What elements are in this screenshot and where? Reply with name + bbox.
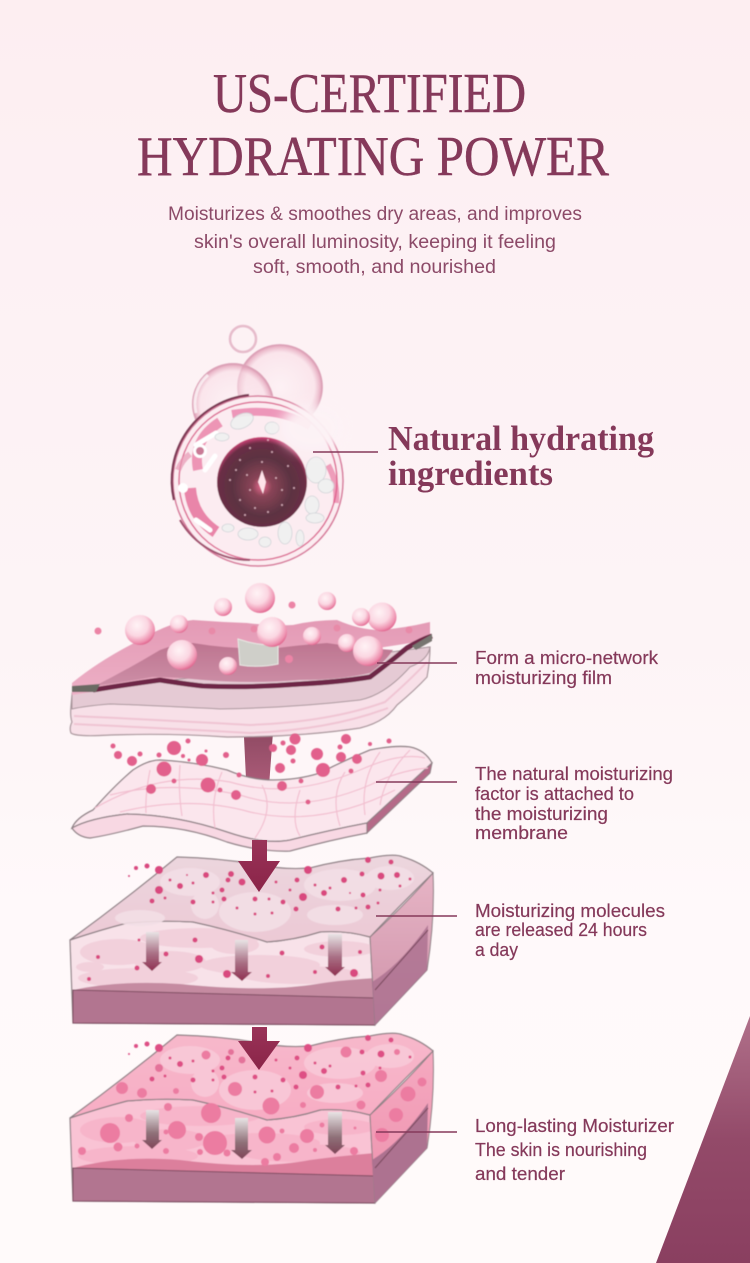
label: block: are released 24 hours [475, 920, 647, 940]
maroon band [93, 636, 432, 690]
label: block: a day [475, 940, 518, 960]
darker inner sheet [95, 643, 393, 686]
heading: natural hydrating ingredients: Natural hydrating [388, 419, 654, 458]
icon: main bubble [172, 395, 344, 567]
label: film: moisturizing film [475, 668, 612, 688]
small nourished dots [128, 1035, 412, 1094]
label: membrane: factor is attached to [475, 784, 634, 804]
label: nourished skin: The skin is nourishing [475, 1140, 647, 1160]
icon: small back bubbles [193, 326, 322, 444]
leader line: membrane [376, 781, 457, 783]
arrow: down middle [231, 940, 252, 981]
nourished side [370, 1051, 433, 1203]
decorative mist [280, 404, 344, 452]
nourished top [70, 1033, 433, 1120]
membrane surface [72, 746, 432, 841]
block dermis [73, 978, 375, 1025]
title [137, 63, 610, 188]
panel: nourished skin block [70, 1033, 433, 1203]
leader line: film [377, 662, 457, 664]
arrow: down right [325, 934, 345, 976]
arrow: down left [142, 932, 162, 971]
label: membrane: membrane [475, 823, 568, 843]
nourished dermis [73, 1153, 375, 1203]
lower tissue band [70, 647, 430, 737]
bubbles on membrane [110, 734, 392, 804]
label: membrane [475, 764, 673, 843]
corner triangle [656, 1016, 750, 1263]
arrow: nourished middle [231, 1118, 252, 1159]
connector column between film and membrane [244, 732, 273, 800]
subtitle [168, 204, 582, 278]
label: block [475, 901, 665, 960]
arrow: nourished left [142, 1110, 162, 1149]
subtitle: skin's overall luminosity, keeping it feeling [194, 232, 556, 253]
label: block: Moisturizing molecules [475, 901, 665, 921]
leader line: nourished skin [376, 1131, 457, 1133]
title: HYDRATING POWER [137, 126, 610, 188]
arrow: nourished right [325, 1112, 345, 1154]
bubbles on film [94, 583, 412, 675]
block side [370, 873, 433, 1025]
top pink sheet [72, 620, 430, 695]
block front [70, 921, 375, 1025]
heading: natural hydrating ingredients: ingredients [388, 454, 553, 493]
panel: film layer [70, 583, 432, 737]
membrane side [367, 763, 432, 833]
subtitle: Moisturizes & smoothes dry areas, and improves [168, 204, 582, 225]
arrow: block to nourished skin [238, 1027, 280, 1070]
large nourished dots [78, 1046, 426, 1166]
panel: membrane layer [72, 734, 432, 851]
nourished front [70, 1099, 375, 1203]
icon: hydrating ingredient bubbles [172, 326, 344, 567]
label: film [475, 648, 659, 688]
label: membrane: The natural moisturizing [475, 764, 673, 784]
icon: grey droplets [215, 410, 334, 547]
leader line: ingredients [313, 451, 378, 453]
label: nourished skin: Long-lasting Moisturizer [475, 1116, 674, 1136]
label: membrane: the moisturizing [475, 804, 608, 824]
glass square [238, 639, 278, 666]
label: nourished skin: and tender [475, 1164, 565, 1184]
subtitle: soft, smooth, and nourished [253, 257, 496, 278]
title: US-CERTIFIED [213, 63, 526, 125]
dots on block [87, 857, 412, 981]
heading: natural hydrating ingredients [388, 419, 654, 493]
grainy layer [72, 647, 430, 709]
membrane front edge [72, 814, 367, 851]
label: film: Form a micro-network [475, 648, 659, 668]
label: nourished skin [475, 1116, 674, 1184]
arrow: membrane to block [238, 840, 280, 892]
block top [70, 855, 433, 942]
leader line: block [376, 915, 457, 917]
panel: moisture release block [70, 855, 433, 1025]
icon: dark core [217, 437, 307, 527]
